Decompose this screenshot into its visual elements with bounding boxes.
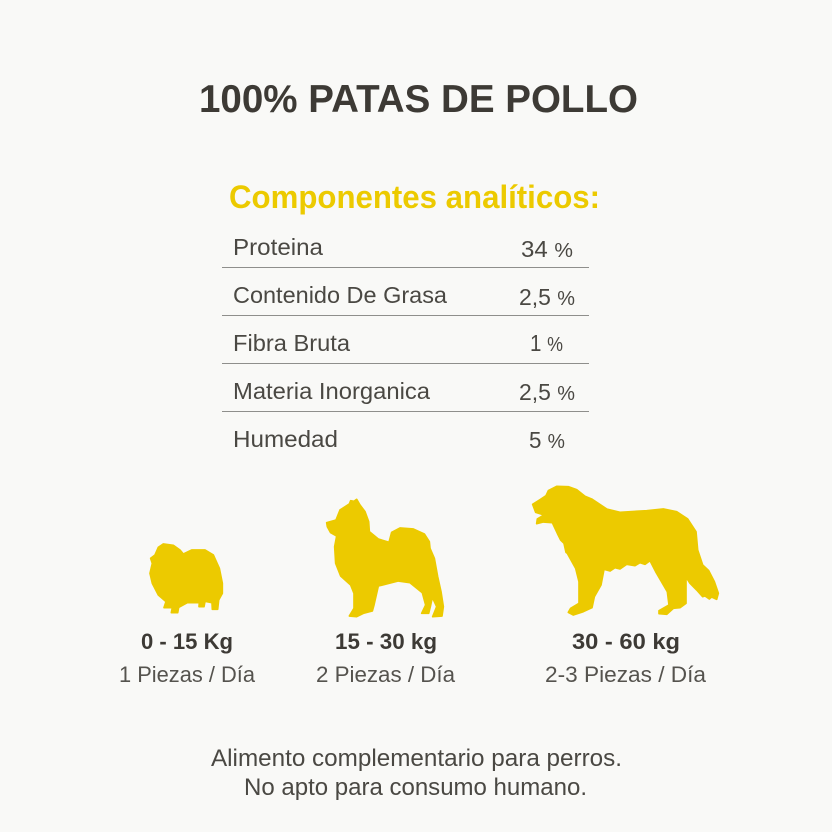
row: proteina: Proteina (233, 234, 323, 260)
label: large dog dosage (545, 629, 707, 687)
footer note: No apto para consumo humano. (244, 774, 587, 801)
row: fibra bruta: 1 % (530, 330, 563, 356)
label: large dog dosage: 2-3 Piezas / Día (545, 662, 707, 687)
footer note: Alimento complementario para perros. (211, 745, 622, 772)
label: medium dog dosage: 2 Piezas / Día (316, 662, 456, 687)
row: materia inorganica: Materia Inorganica (233, 378, 430, 404)
row: humedad (233, 426, 565, 453)
table heading: Componentes analíticos: (229, 179, 600, 215)
label: medium dog dosage: 15 - 30 kg (335, 629, 437, 654)
icon: medium dog (327, 499, 443, 617)
row: contenido de grasa: Contenido De Grasa (233, 282, 447, 308)
label: small dog dosage: 0 - 15 Kg (141, 629, 233, 654)
row: proteina: 34 % (521, 236, 573, 262)
label: small dog dosage: 1 Piezas / Día (119, 662, 256, 687)
row: humedad: 5 % (529, 427, 565, 453)
title: 100% PATAS DE POLLO (199, 78, 638, 121)
row: contenido de grasa: 2,5 % (519, 284, 575, 310)
row: materia inorganica (233, 378, 575, 405)
icon: large dog (533, 486, 718, 615)
row: proteina (233, 234, 573, 262)
label: large dog dosage: 30 - 60 kg (572, 629, 680, 654)
icon: small dog (150, 544, 222, 613)
label: small dog dosage (119, 629, 256, 687)
row: materia inorganica: 2,5 % (519, 379, 575, 405)
row: fibra bruta (233, 330, 563, 356)
row: fibra bruta: Fibra Bruta (233, 330, 350, 356)
row: contenido de grasa (233, 282, 575, 310)
row: humedad: Humedad (233, 426, 338, 452)
panel: analytical components table (222, 179, 600, 453)
label: medium dog dosage (316, 629, 456, 687)
footer note (211, 745, 622, 801)
